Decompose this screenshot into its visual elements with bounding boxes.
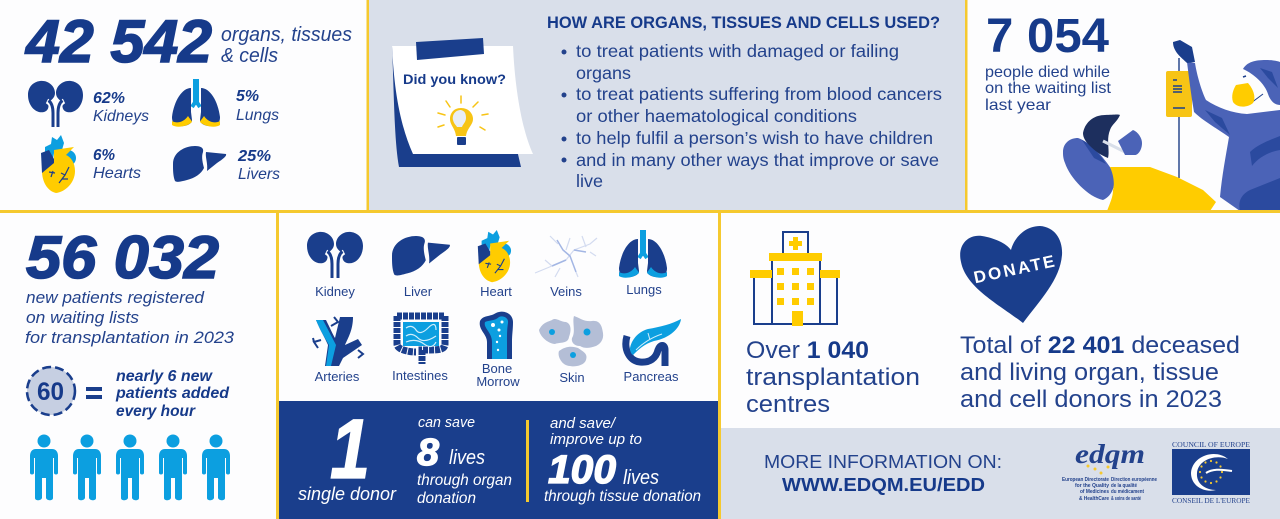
caption: last year — [985, 97, 1052, 114]
icon: bone marrow — [480, 312, 513, 359]
icon: 60 minutes dial: 60 — [37, 378, 64, 406]
label: livers 25%: 25% — [237, 148, 271, 165]
icon: kidney — [307, 232, 363, 278]
organ donation text: can save — [418, 414, 475, 431]
text: over 1 040 centres: Over 1 040 — [746, 337, 869, 364]
bullet list: to treat patients with damaged or failing — [576, 41, 899, 61]
headline caption — [221, 24, 352, 67]
panel: new patients on waiting lists — [25, 224, 235, 500]
logo: Council of Europe: CONSEIL DE L'EUROPE — [1172, 496, 1250, 505]
panel: how organs are used background — [368, 0, 966, 211]
organ donation text: donation — [417, 490, 476, 507]
text: total donors: and cell donors in 2023 — [960, 386, 1222, 413]
caption — [25, 288, 235, 347]
caption: on waiting lists — [26, 308, 139, 327]
note heading: Did you know? — [403, 71, 506, 87]
label: lungs 5%: 5% — [236, 88, 259, 105]
icon: kidneys — [28, 81, 83, 127]
icon: heart — [478, 230, 511, 282]
headline caption: organs, tissues — [221, 24, 352, 46]
icon: lungs — [619, 230, 667, 278]
text: over 1 040 centres — [746, 337, 920, 418]
logo: EDQM: du médicament — [1111, 489, 1144, 495]
text: more information — [764, 452, 1002, 495]
text: more information: WWW.EDQM.EU/EDD — [782, 475, 985, 495]
label: lungs: Lungs — [626, 282, 662, 297]
icon: liver — [392, 236, 450, 275]
callout: nearly 6 per hour: patients added — [115, 385, 230, 402]
icon: donate heart: DONATE — [972, 252, 1056, 287]
panel: transplantation centres — [746, 232, 920, 418]
bullet list: to treat patients suffering from blood cancers — [576, 84, 942, 104]
caption: new patients registered — [26, 288, 205, 307]
icon: sticky note with light bulb — [392, 38, 533, 167]
tissue donation text: improve up to — [550, 431, 642, 448]
text: total donors: and living organ, tissue — [960, 359, 1219, 386]
panel: deaths on waiting list — [985, 10, 1280, 211]
text: over 1 040 centres: centres — [746, 391, 830, 418]
caption: people died while — [985, 64, 1110, 81]
number 7 054: 7 054 — [986, 10, 1109, 63]
logo: EDQM: European Directorate — [1062, 477, 1109, 483]
panel: organs, tissues and cells totals — [25, 8, 352, 193]
panel: did you know and organ uses — [392, 13, 942, 191]
logo: EDQM — [1062, 439, 1157, 502]
bullet list — [562, 41, 942, 191]
logo: EDQM: de la qualité — [1111, 483, 1137, 489]
logo: EDQM: for the Quality — [1075, 483, 1109, 489]
icon: lungs — [172, 79, 220, 127]
label: skin: Skin — [559, 370, 585, 385]
organ donation text: 8 — [417, 432, 440, 474]
tissue donation text — [544, 415, 701, 505]
label: arteries: Arteries — [315, 369, 360, 384]
icon: veins — [535, 236, 597, 277]
icon: heart — [41, 135, 76, 193]
label: intestines: Intestines — [392, 368, 448, 383]
tissue donation text: and save/ — [550, 415, 617, 432]
icon: light bulb — [438, 96, 488, 145]
bullet list: organs — [576, 63, 631, 83]
text: more information: MORE INFORMATION ON: — [764, 452, 1002, 472]
tissue donation text: 100 — [548, 448, 616, 492]
organ donation text — [417, 414, 512, 507]
illustration: patient and nurse — [1063, 40, 1280, 211]
label: lungs 5% — [236, 88, 279, 124]
label: livers 25%: Livers — [238, 166, 280, 183]
caption: on the waiting list — [985, 80, 1112, 97]
icon: liver — [173, 146, 226, 182]
text: over 1 040 centres: transplantation — [746, 364, 920, 391]
caption: single donor: single donor — [298, 484, 397, 504]
logo: EDQM: of Medicines — [1080, 489, 1109, 495]
label: veins: Veins — [550, 284, 582, 299]
panel: donors — [960, 226, 1240, 413]
panel: organ and tissue grid — [307, 230, 681, 389]
icon: five people — [30, 434, 230, 500]
divider — [526, 420, 529, 502]
callout: nearly 6 per hour: every hour — [116, 403, 196, 420]
label: bone marrow: Morrow — [476, 374, 520, 389]
icon: hospital — [750, 232, 840, 326]
logo: EDQM: Direction européenne — [1111, 477, 1157, 483]
callout: nearly 6 per hour — [115, 368, 230, 420]
bullet list: to help fulfil a person’s wish to have children — [576, 128, 933, 148]
label: kidneys 62%: 62% — [93, 90, 125, 107]
label: pancreas: Pancreas — [624, 369, 679, 384]
logo: EDQM: & HealthCare — [1079, 496, 1109, 502]
bullet list: and in many other ways that improve or save — [576, 150, 939, 170]
text: total donors — [960, 332, 1240, 413]
bullet list: or other haematological conditions — [576, 106, 857, 126]
logo: EDQM: & soins de santé — [1111, 496, 1141, 502]
headline caption: & cells — [221, 45, 278, 67]
label: liver: Liver — [404, 284, 433, 299]
logo: EDQM: edqm — [1075, 439, 1145, 469]
logo: Council of Europe: COUNCIL OF EUROPE — [1172, 440, 1250, 449]
icon: skin cells — [539, 316, 603, 366]
icon: donate heart — [960, 226, 1062, 323]
label: livers 25% — [237, 148, 280, 183]
icon: arteries — [313, 317, 363, 366]
icon: 60 minutes dial — [27, 367, 75, 415]
label: hearts 6% — [93, 147, 141, 182]
panel: more information and logos — [764, 439, 1250, 505]
label: kidneys 62% — [93, 90, 149, 125]
panel: one donor background — [278, 401, 719, 519]
icon: intestines — [397, 316, 445, 364]
number 1: 1 — [330, 402, 370, 496]
label: kidneys 62%: Kidneys — [93, 108, 149, 125]
label: lungs 5%: Lungs — [236, 107, 279, 124]
tissue donation text: lives — [623, 467, 659, 489]
icon: equals sign — [86, 387, 102, 399]
number 56 032: 56 032 — [26, 224, 219, 291]
label: bone marrow: Bone — [482, 361, 512, 376]
bullet list: live — [576, 171, 603, 191]
organ donation text: lives — [449, 447, 485, 469]
callout: nearly 6 per hour: nearly 6 new — [116, 368, 214, 385]
caption: for transplantation in 2023 — [25, 328, 235, 347]
label: hearts 6%: 6% — [93, 147, 115, 164]
icon: pancreas — [626, 319, 681, 366]
caption — [985, 64, 1112, 114]
logo: Council of Europe — [1172, 440, 1250, 505]
label: hearts 6%: Hearts — [93, 165, 141, 182]
label: bone marrow — [476, 361, 520, 389]
panel: more information background — [720, 428, 1280, 519]
heading: how are organs used: HOW ARE ORGANS, TISSUES AND CELLS USED? — [547, 13, 940, 32]
headline number 42 542: 42 542 — [25, 8, 212, 75]
label: heart: Heart — [480, 284, 512, 299]
tissue donation text: through tissue donation — [544, 488, 701, 505]
text: total donors: Total of 22 401 deceased — [960, 332, 1240, 359]
label: kidney: Kidney — [315, 284, 355, 299]
panel: one donor can save lives — [298, 402, 701, 507]
organ donation text: through organ — [417, 472, 512, 489]
